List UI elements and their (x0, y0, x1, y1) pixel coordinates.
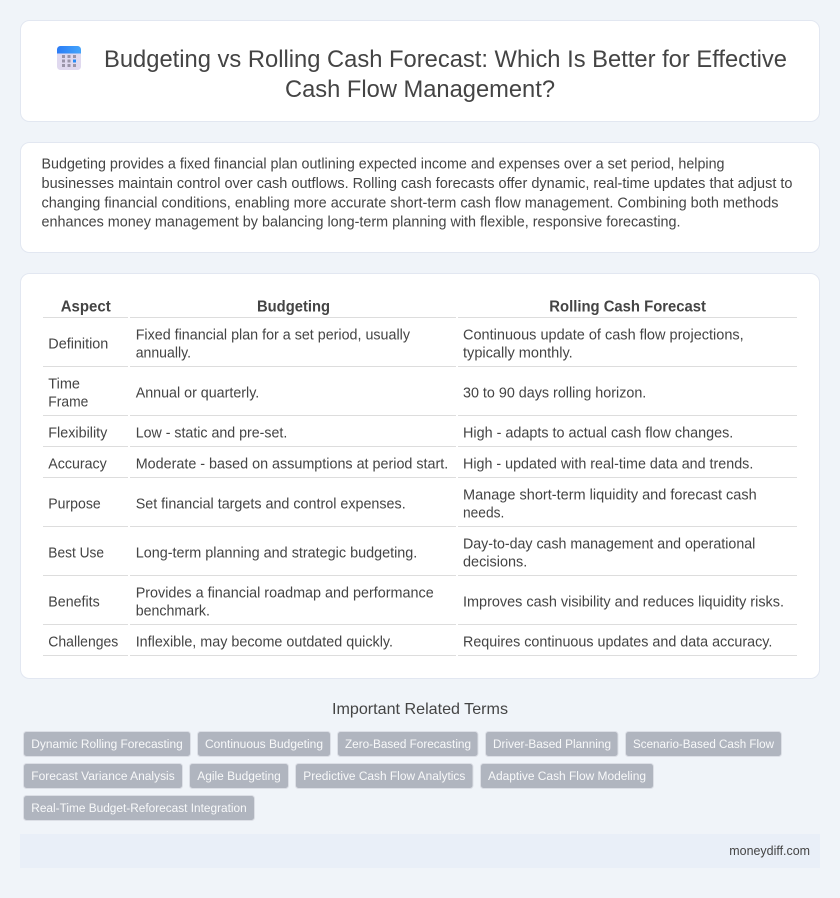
row: flexibility: Flexibility (48, 425, 108, 441)
row: definition: Fixed financial plan for a set period, usually (136, 327, 411, 343)
row: best use: decisions. (463, 554, 527, 570)
tag: Continuous Budgeting (205, 737, 323, 751)
row: flexibility: Low - static and pre-set. (136, 425, 287, 441)
row: definition: annually. (136, 345, 191, 361)
tag (190, 764, 288, 788)
panel: intro text (20, 142, 820, 252)
row: definition: Continuous update of cash flow projections, (463, 327, 744, 343)
row: challenges (43, 634, 797, 656)
row: benefits: Provides a financial roadmap and performance (136, 585, 434, 601)
row: purpose: Purpose (48, 496, 101, 512)
tag: Dynamic Rolling Forecasting (31, 737, 183, 751)
heading: important related terms: Important Related Terms (332, 701, 508, 718)
panel: related term tags (24, 732, 782, 820)
row: benefits (43, 585, 797, 624)
row: flexibility (43, 425, 797, 446)
panel: intro text: changing financial conditions, enabling more accurate short-term cash flow management. Combining both methods (42, 196, 778, 212)
row: accuracy: Accuracy (48, 456, 107, 472)
row: definition: typically monthly. (463, 345, 573, 361)
tag (198, 732, 330, 756)
tag: Real-Time Budget-Reforecast Integration (31, 801, 247, 815)
row: purpose: Set financial targets and control expenses. (136, 496, 406, 512)
panel: title header (20, 20, 820, 122)
row: best use: Day-to-day cash management and operational (463, 536, 755, 552)
tag: Agile Budgeting (197, 769, 281, 783)
tag: Predictive Cash Flow Analytics (303, 769, 465, 783)
row: time frame (43, 376, 797, 416)
row: benefits: Benefits (48, 594, 100, 610)
title (104, 46, 787, 103)
tag: Driver-Based Planning (493, 737, 611, 751)
table header row: Budgeting (257, 298, 330, 316)
row: time frame: Time (48, 376, 80, 392)
table header row (43, 298, 797, 318)
row: best use: Long-term planning and strategic budgeting. (136, 545, 417, 561)
panel: intro text: enhances money management by balancing long-term planning with flexible, responsive forecasting. (42, 214, 680, 230)
row: definition (43, 327, 797, 366)
title: Cash Flow Management? (285, 76, 555, 103)
row: challenges: Inflexible, may become outdated quickly. (136, 634, 393, 650)
row: challenges: Requires continuous updates and data accuracy. (463, 634, 772, 650)
panel: intro text: businesses maintain control over cash outflows. Rolling cash forecasts offer dynamic, real-time updates that adjust to (42, 176, 792, 192)
tag (338, 732, 478, 756)
tag (480, 764, 654, 788)
row: challenges: Challenges (48, 634, 118, 650)
footer: moneydiff.com (729, 844, 810, 858)
icon: calendar (57, 46, 81, 70)
tag (296, 764, 473, 788)
tag (486, 732, 618, 756)
row: best use (43, 536, 797, 576)
row: purpose: Manage short-term liquidity and forecast cash (463, 487, 757, 503)
row: accuracy: High - updated with real-time data and trends. (463, 456, 753, 472)
title: Budgeting vs Rolling Cash Forecast: Which Is Better for Effective (104, 46, 787, 73)
tag (24, 764, 182, 788)
row: purpose: needs. (463, 505, 504, 521)
footer (20, 834, 820, 868)
tag: Zero-Based Forecasting (345, 737, 471, 751)
row: definition: Definition (48, 336, 108, 352)
tag: Adaptive Cash Flow Modeling (488, 769, 646, 783)
tag (24, 732, 190, 756)
tag (626, 732, 782, 756)
row: time frame: Annual or quarterly. (136, 385, 259, 401)
panel: comparison table (20, 274, 820, 678)
row: flexibility: High - adapts to actual cash flow changes. (463, 425, 733, 441)
row: time frame: Frame (48, 394, 88, 410)
tag: Scenario-Based Cash Flow (633, 737, 774, 751)
row: accuracy (43, 456, 797, 478)
table header row: Aspect (61, 298, 111, 316)
table header row: Rolling Cash Forecast (549, 298, 707, 316)
row: benefits: benchmark. (136, 603, 210, 619)
row: purpose (43, 487, 797, 526)
row: best use: Best Use (48, 545, 104, 561)
row: benefits: Improves cash visibility and reduces liquidity risks. (463, 594, 784, 610)
tag: Forecast Variance Analysis (31, 769, 175, 783)
tag (24, 796, 254, 820)
panel: intro text: Budgeting provides a fixed financial plan outlining expected income and expenses over a set period, helping (42, 156, 724, 172)
row: accuracy: Moderate - based on assumptions at period start. (136, 456, 448, 472)
row: time frame: 30 to 90 days rolling horizon. (463, 385, 646, 401)
